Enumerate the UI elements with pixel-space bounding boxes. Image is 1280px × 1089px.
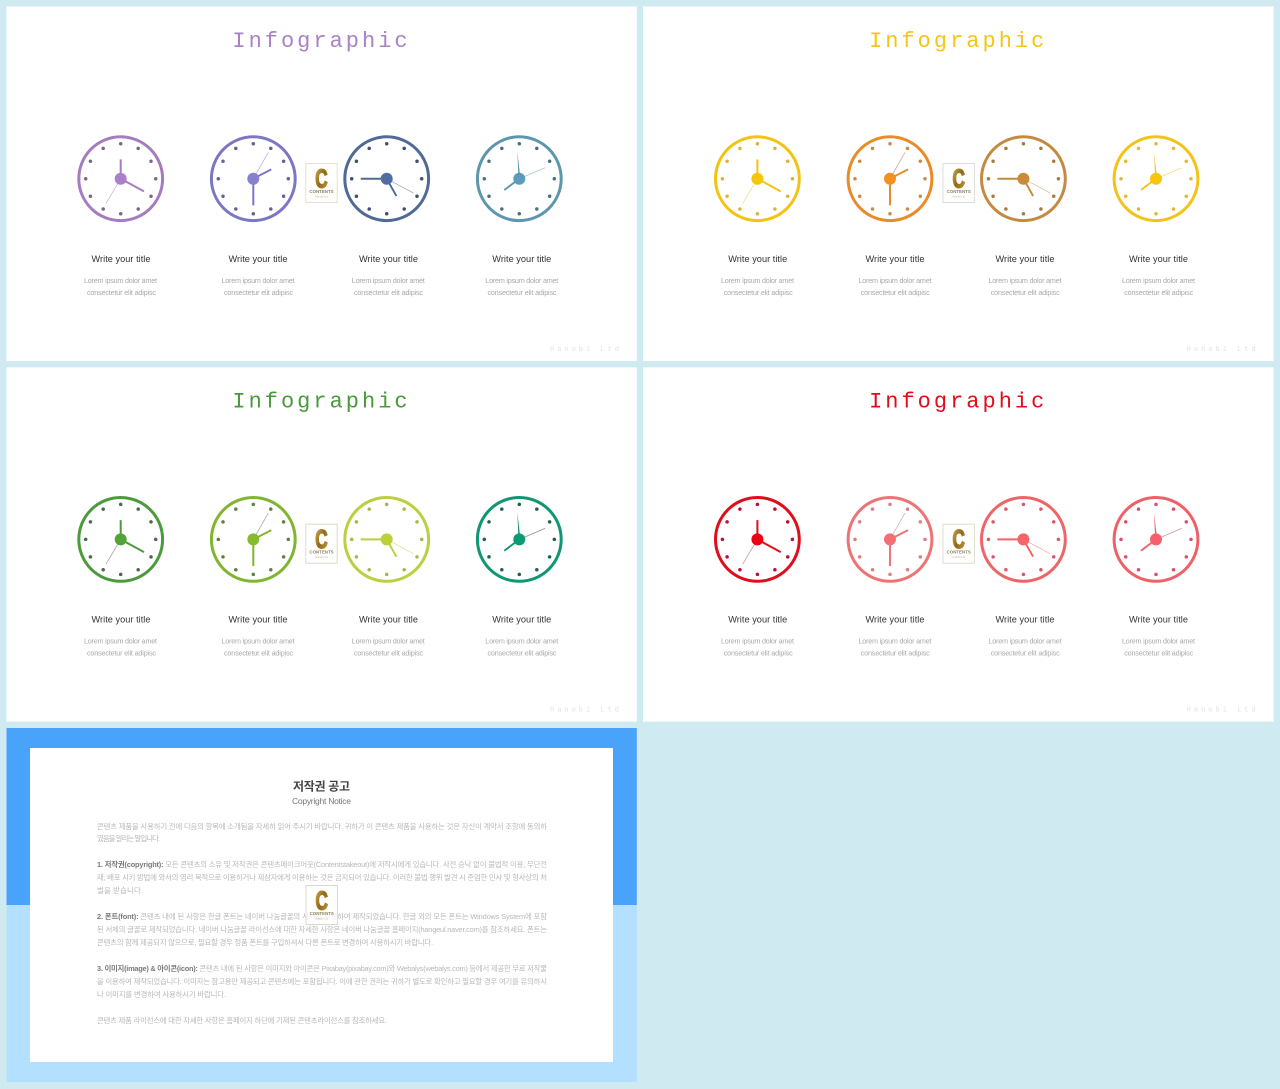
- clock: lime 2: [211, 498, 295, 581]
- logo: contents badge: [306, 164, 337, 202]
- panel: copyright notice: [6, 728, 637, 1082]
- column text 2: [222, 254, 294, 297]
- column text 2: consectetur elit adipisc: [861, 649, 930, 658]
- title: green: Infographic: [232, 390, 411, 415]
- column text 4: consectetur elit adipisc: [1124, 649, 1194, 658]
- column text 4: Write your title: [492, 254, 551, 264]
- clock: orange 2: [848, 137, 932, 221]
- column text 3: consectetur elit adipisc: [991, 288, 1060, 297]
- text block: copyright: 1. 저작권(copyright): 모든 콘텐츠의 소유 및 저작권은 콘텐츠메이크어웃(Contentstakeout)에 저작시에게 있습니다. 사전 승낙 없이 불법적 이용, 무단전: [97, 860, 547, 869]
- logo: contents badge: CONTENTS: [310, 911, 334, 916]
- clock: brown 3: [982, 137, 1065, 221]
- column text 4: Lorem ipsum dolor amet: [1122, 276, 1195, 285]
- column text 3: Lorem ipsum dolor amet: [988, 637, 1062, 646]
- panel: green clocks: [6, 367, 637, 722]
- column text 1: [84, 254, 157, 297]
- logo: contents badge: C: [316, 886, 328, 915]
- column text 3: Write your title: [996, 254, 1054, 264]
- column text 3: Lorem ipsum dolor amet: [352, 276, 425, 285]
- text block: image and icon: 을 이용하여 제작되었습니다. 이미지는 참고용만 제공되고 콘텐츠에는 포함됩니다. 이에 관한 권리는 귀하가 별도로 확인하고 필요할 경우 여기를 유의하시: [97, 977, 547, 986]
- panel: red clocks: [643, 367, 1274, 722]
- column text 4: [1122, 254, 1195, 297]
- panel: yellow clocks: [643, 6, 1274, 361]
- column text 4: [485, 254, 558, 297]
- text block: image and icon: [97, 964, 547, 999]
- text block: image and icon: 나 이미지를 변경하여 사용하시기 바랍니다.: [97, 990, 226, 999]
- text block: copyright: [97, 860, 547, 895]
- panel: purple clocks: [6, 6, 637, 361]
- column text 4: Write your title: [1129, 615, 1188, 625]
- column text 2: consectetur elit adipisc: [224, 649, 293, 658]
- logo: contents badge: CONTENTS: [947, 189, 971, 194]
- heading: copyright: 저작권 공고: [293, 778, 350, 794]
- text block: font: 2. 폰트(font): 콘텐츠 내에 된 사항은 한글 폰트는 네이버 나눔글꼴의 서체를 사용하여 제작되었습니다. 한글 외의 모든 폰트는 Windows System에 포함: [97, 912, 547, 921]
- logo: contents badge: C: [953, 525, 965, 554]
- logo: contents badge: Hanobi Ltd: [315, 916, 329, 920]
- text block: font: 된 서체의 글꼴로 제작되었습니다. 네이버 나눔글꼴 라이선스에 대한 자세한 사항은 네이버 나눔글꼴 홈페이지(hangeul.naver.com)를 참조하세요. 폰트는: [97, 925, 547, 934]
- clock: green 1: [79, 498, 163, 581]
- clock: violet 2: [211, 137, 295, 221]
- column text 3: [988, 254, 1062, 297]
- clock: coral 4: [1114, 498, 1198, 581]
- logo: contents badge: CONTENTS: [947, 550, 971, 555]
- subheading: Copyright Notice: [292, 796, 351, 806]
- column text 3: Lorem ipsum dolor amet: [352, 637, 425, 646]
- column text 4: consectetur elit adipisc: [488, 649, 557, 658]
- column text 1: Lorem ipsum dolor amet: [84, 637, 157, 646]
- clock: salmon 2: [848, 498, 932, 581]
- column text 4: consectetur elit adipisc: [488, 288, 557, 297]
- column text 1: Write your title: [728, 615, 787, 625]
- column text 3: Write your title: [359, 615, 418, 625]
- column text 4: [485, 615, 558, 658]
- column text 2: Lorem ipsum dolor amet: [222, 276, 294, 285]
- text block: font: 콘텐츠의 함께 제공되지 않으므로, 필요할 경우 정품 폰트를 구입하셔서 다른 폰트로 변경하여 사용하시기 바랍니다.: [97, 938, 433, 947]
- logo: contents badge: CONTENTS: [309, 189, 334, 194]
- brand label: Hanobi Ltd: [1187, 346, 1259, 354]
- text block: intro: [97, 822, 547, 843]
- column text 2: Write your title: [866, 254, 924, 264]
- column text 1: Write your title: [728, 254, 787, 264]
- column text 3: [352, 615, 425, 658]
- text block: image and icon: 3. 이미지(image) & 아이콘(icon): 콘텐츠 내에 된 사항은 이미지와 아이콘은 Pixabay(pixabay.com)와 Webalys(webalys.com) 등에서 제공한 무료 저작물: [97, 964, 547, 973]
- column text 4: Lorem ipsum dolor amet: [485, 637, 558, 646]
- logo: contents badge: [943, 164, 974, 202]
- column text 2: consectetur elit adipisc: [861, 288, 930, 297]
- column text 4: consectetur elit adipisc: [1124, 288, 1194, 297]
- brand label: Hanobi Ltd: [1187, 707, 1259, 715]
- column text 2: Lorem ipsum dolor amet: [222, 637, 294, 646]
- logo: contents badge: Hanobi Ltd: [315, 194, 328, 198]
- logo: contents badge: [306, 886, 337, 924]
- column text 3: [988, 615, 1062, 658]
- clock: yellow 1: [716, 137, 799, 221]
- column text 4: [1122, 615, 1195, 658]
- column text 2: Write your title: [228, 254, 288, 264]
- clock: teal-blue 4: [477, 137, 561, 221]
- logo: contents badge: Hanobi Ltd: [315, 555, 328, 559]
- column text 1: consectetur elit adipisc: [724, 649, 793, 658]
- clock: red 1: [716, 498, 799, 581]
- logo: contents badge: C: [315, 164, 328, 193]
- title: red: Infographic: [869, 390, 1047, 415]
- brand label: Hanobi Ltd: [550, 346, 622, 354]
- column text 1: Lorem ipsum dolor amet: [721, 637, 794, 646]
- logo: contents badge: [306, 524, 337, 563]
- column text 3: Write your title: [359, 254, 418, 264]
- column text 4: Lorem ipsum dolor amet: [485, 276, 558, 285]
- text block: intro: 였음을 알리는 말입니다.: [97, 834, 160, 843]
- clock: emerald 4: [477, 498, 561, 581]
- column text 1: consectetur elit adipisc: [87, 649, 156, 658]
- column text 3: consectetur elit adipisc: [354, 649, 423, 658]
- column text 2: Lorem ipsum dolor amet: [858, 276, 932, 285]
- logo: contents badge: C: [953, 164, 965, 193]
- column text 4: Write your title: [1129, 254, 1188, 264]
- column text 2: Lorem ipsum dolor amet: [858, 637, 932, 646]
- clock: navy 3: [345, 137, 429, 221]
- column text 2: Write your title: [866, 615, 924, 625]
- logo: contents badge: Hanobi Ltd: [952, 194, 966, 198]
- column text 4: Lorem ipsum dolor amet: [1122, 637, 1195, 646]
- logo: contents badge: [943, 524, 974, 563]
- column text 2: Write your title: [228, 615, 288, 625]
- logo: contents badge: Hanobi Ltd: [952, 555, 966, 559]
- column text 1: Write your title: [92, 254, 150, 264]
- column text 1: [721, 254, 794, 297]
- clock: yellow-green 3: [345, 498, 429, 581]
- column text 1: [721, 615, 794, 658]
- text block: intro: 콘텐츠 제품을 사용하기 전에 다음의 항목에 소개됨을 자세히 읽어 주시기 바랍니다. 귀하가 이 콘텐츠 제품을 사용하는 것은 자신이 계약서 조항에 동의하: [97, 822, 547, 831]
- column text 3: consectetur elit adipisc: [354, 288, 423, 297]
- column text 2: consectetur elit adipisc: [224, 288, 293, 297]
- column text 3: Write your title: [996, 615, 1054, 625]
- text block: copyright: 벌을 받습니다.: [97, 886, 143, 895]
- column text 1: [84, 615, 157, 658]
- title: yellow: Infographic: [869, 29, 1047, 54]
- brand label: Hanobi Ltd: [550, 707, 622, 715]
- column text 1: Lorem ipsum dolor amet: [84, 276, 157, 285]
- column text 2: [858, 615, 932, 658]
- column text 2: [222, 615, 294, 658]
- column text 1: Write your title: [92, 615, 150, 625]
- column text 1: consectetur elit adipisc: [724, 288, 793, 297]
- text block: font: [97, 912, 547, 947]
- clock: yellow 4: [1114, 137, 1198, 221]
- clock: coral 3: [982, 498, 1065, 581]
- column text 3: [352, 254, 425, 297]
- column text 1: Lorem ipsum dolor amet: [721, 276, 794, 285]
- column text 2: [858, 254, 932, 297]
- logo: contents badge: CONTENTS: [309, 550, 334, 555]
- column text 3: Lorem ipsum dolor amet: [988, 276, 1062, 285]
- text block: license: 콘텐츠 제품 라이선스에 대한 자세한 사항은 홈페이지 하단에 기재된 콘텐츠라이선스를 참조하세요.: [97, 1016, 387, 1025]
- column text 1: consectetur elit adipisc: [87, 288, 156, 297]
- text block: copyright: 재, 배포 시키 방법에 와서의 영리 목적으로 이용하거나 제삼자에게 이용하는 것은 금지되어 있습니다. 이러한 불법 행위 발견 시 준엄한 민사 및 형사상의 처: [97, 873, 547, 882]
- clock: purple 1: [79, 137, 163, 221]
- title: purple: Infographic: [232, 29, 411, 54]
- logo: contents badge: C: [315, 525, 328, 554]
- column text 3: consectetur elit adipisc: [991, 649, 1060, 658]
- column text 4: Write your title: [492, 615, 551, 625]
